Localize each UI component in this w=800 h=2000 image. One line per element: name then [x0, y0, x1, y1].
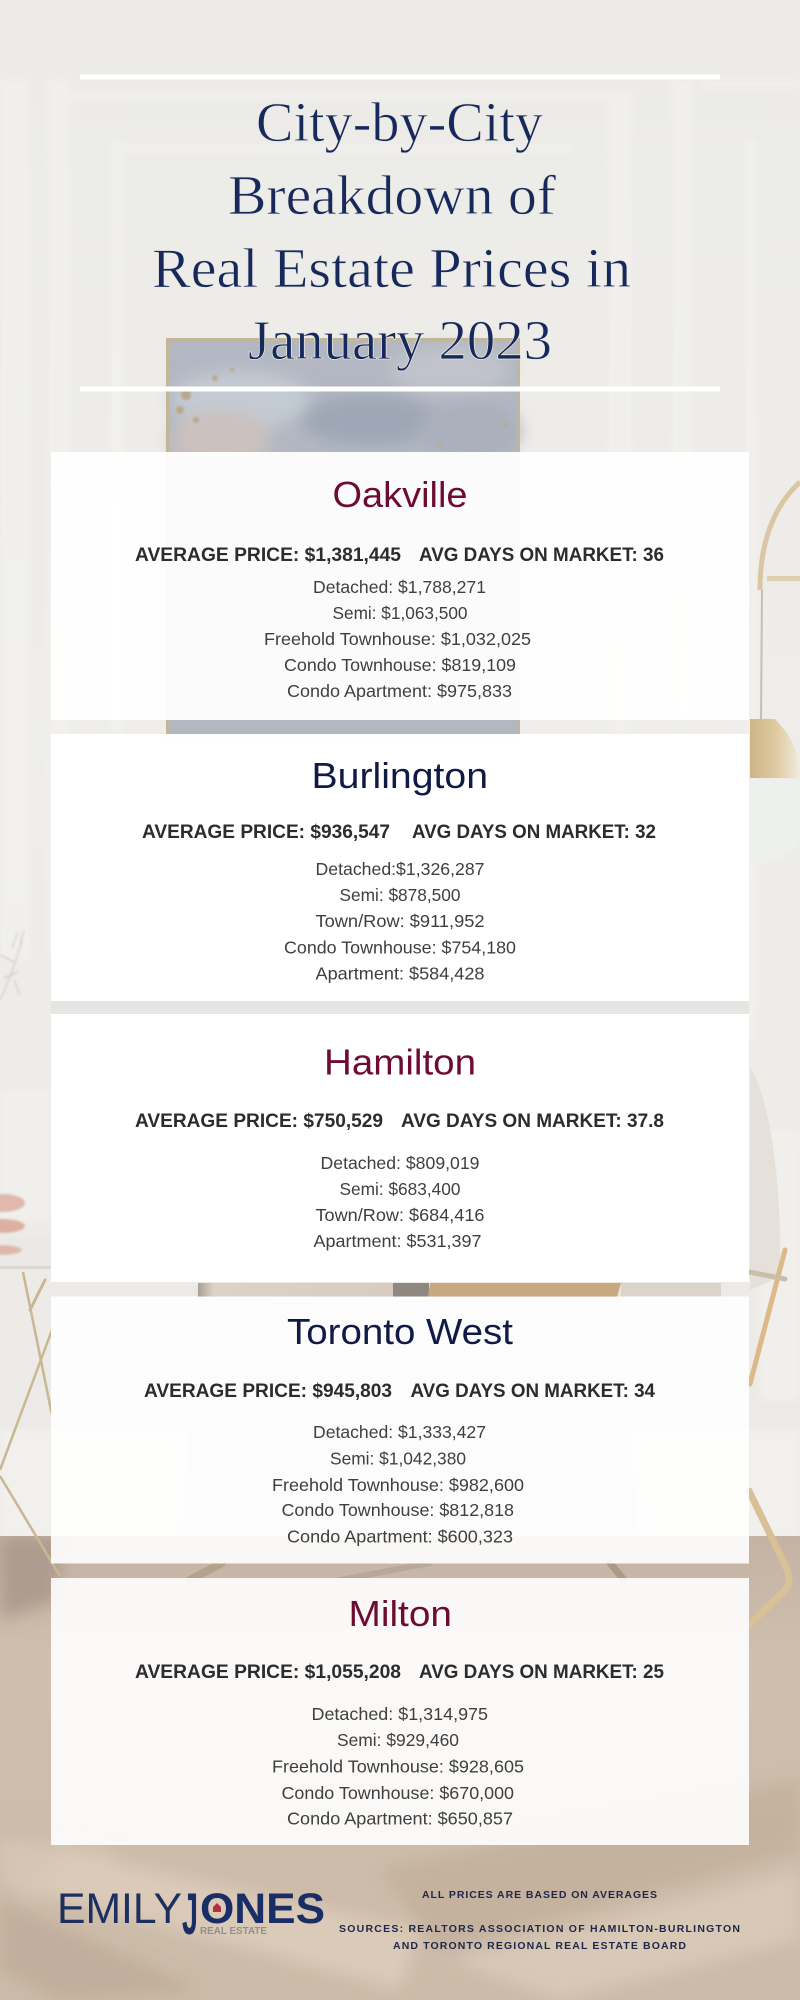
price list: Oakville: Freehold Townhouse: $1,032,025 [264, 629, 531, 649]
title bottom rule [80, 386, 720, 392]
price list: Toronto West: Semi: $1,042,380 [330, 1448, 466, 1468]
summary: Hamilton [135, 1110, 664, 1132]
title: January 2023 [248, 310, 552, 372]
panel: Toronto West [51, 1296, 749, 1564]
wall [0, 0, 800, 1540]
footnote and sources: ALL PRICES ARE BASED ON AVERAGES [422, 1889, 657, 1901]
summary: Hamilton: AVG DAYS ON MARKET: 37.8 [401, 1110, 664, 1132]
logo: Emily Jones Real Estate: ONES [200, 1885, 325, 1933]
floor herringbone streaks [0, 1536, 800, 2000]
summary: Milton: AVG DAYS ON MARKET: 25 [419, 1661, 664, 1683]
price list: Burlington: Semi: $878,500 [340, 885, 461, 905]
title: Breakdown of [228, 165, 556, 227]
heading: Toronto West: Toronto West [287, 1311, 513, 1352]
price list: Oakville: Condo Apartment: $975,833 [287, 681, 512, 701]
title [152, 92, 631, 372]
price list: Toronto West: Condo Apartment: $600,323 [287, 1526, 513, 1546]
baseboard [0, 1430, 800, 1538]
panel: Milton [51, 1578, 749, 1845]
price list: Oakville: Condo Townhouse: $819,109 [284, 655, 516, 675]
side table with pink rings [0, 1194, 60, 1576]
chair [30, 1067, 789, 1625]
heading: Milton: Milton [348, 1593, 452, 1634]
price list: Hamilton: Semi: $683,400 [340, 1179, 461, 1199]
logo: Emily Jones Real Estate [57, 1882, 325, 1947]
title: Real Estate Prices in [152, 238, 631, 300]
branch decoration [0, 930, 24, 1000]
summary: Burlington [142, 821, 656, 843]
summary: Toronto West: AVG DAYS ON MARKET: 34 [410, 1380, 655, 1402]
logo: Emily Jones Real Estate: REAL ESTATE [200, 1925, 267, 1937]
floor [0, 1536, 800, 2000]
summary: Milton: AVERAGE PRICE: $1,055,208 [135, 1661, 401, 1683]
logo: Emily Jones Real Estate: EMILY [57, 1885, 182, 1933]
summary: Oakville: AVG DAYS ON MARKET: 36 [419, 544, 664, 566]
footnote and sources: AND TORONTO REGIONAL REAL ESTATE BOARD [393, 1940, 686, 1952]
summary: Milton [135, 1661, 664, 1683]
title top rule [80, 74, 720, 80]
price list: Oakville: Detached: $1,788,271 [313, 577, 486, 597]
footnote and sources [339, 1889, 740, 1952]
painting [167, 339, 520, 740]
price list: Burlington: Condo Townhouse: $754,180 [284, 938, 516, 958]
summary: Oakville [135, 544, 664, 566]
price list: Burlington: Detached:$1,326,287 [316, 859, 484, 879]
heading: Burlington: Burlington [312, 755, 488, 796]
panel: Hamilton [51, 1014, 749, 1282]
price list: Hamilton: Apartment: $531,397 [314, 1231, 482, 1251]
price list: Burlington: Town/Row: $911,952 [316, 911, 484, 931]
summary: Oakville: AVERAGE PRICE: $1,381,445 [135, 544, 401, 566]
summary: Burlington: AVG DAYS ON MARKET: 32 [412, 821, 656, 843]
summary: Burlington: AVERAGE PRICE: $936,547 [142, 821, 390, 843]
price list: Oakville [264, 577, 531, 701]
price list: Hamilton: Town/Row: $684,416 [316, 1205, 484, 1225]
price list: Burlington: Apartment: $584,428 [316, 964, 484, 984]
icon: red house in the O [213, 1903, 221, 1912]
price list: Milton: Semi: $929,460 [337, 1730, 459, 1750]
title: City-by-City [256, 92, 543, 154]
summary: Toronto West [144, 1380, 655, 1402]
logo: Emily Jones Real Estate: J [182, 1882, 198, 1947]
lamp [750, 482, 800, 864]
price list: Hamilton [314, 1153, 484, 1251]
footnote and sources: SOURCES: REALTORS ASSOCIATION OF HAMILTON-BURLINGTON [339, 1923, 740, 1935]
price list: Burlington [284, 859, 516, 984]
heading: Oakville: Oakville [332, 474, 468, 515]
wall mouldings [0, 80, 800, 1400]
price list: Milton: Freehold Townhouse: $928,605 [272, 1756, 524, 1776]
price list: Toronto West: Freehold Townhouse: $982,600 [272, 1475, 524, 1495]
wall darker gap [51, 1001, 749, 1014]
price list: Milton: Detached: $1,314,975 [312, 1704, 488, 1724]
price list: Milton: Condo Townhouse: $670,000 [282, 1783, 514, 1803]
price list: Hamilton: Detached: $809,019 [320, 1153, 480, 1173]
price list: Oakville: Semi: $1,063,500 [332, 603, 468, 623]
price list: Toronto West [272, 1422, 524, 1546]
price list: Milton: Condo Apartment: $650,857 [287, 1808, 513, 1828]
price list: Milton [272, 1704, 524, 1828]
price list: Toronto West: Condo Townhouse: $812,818 [282, 1500, 514, 1520]
summary: Hamilton: AVERAGE PRICE: $750,529 [135, 1110, 383, 1132]
price list: Toronto West: Detached: $1,333,427 [313, 1422, 486, 1442]
panel: Oakville [51, 452, 749, 720]
panel: Burlington [51, 734, 749, 1001]
heading: Hamilton: Hamilton [324, 1042, 476, 1082]
summary: Toronto West: AVERAGE PRICE: $945,803 [144, 1380, 392, 1402]
